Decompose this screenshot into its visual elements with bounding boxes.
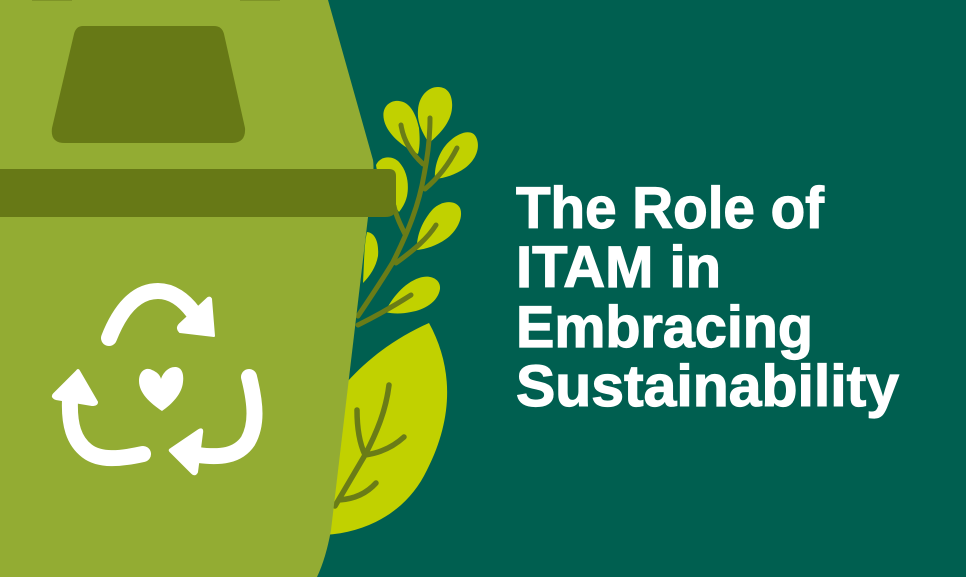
title: Embracing — [516, 295, 813, 360]
icon: large leaf — [325, 323, 447, 535]
title: The Role of — [516, 176, 825, 241]
icon: recycling symbol with heart — [53, 291, 254, 474]
icon: leafy branch — [358, 87, 478, 325]
bin lid rim — [0, 169, 396, 217]
bin top edge marks — [32, 0, 280, 1]
title: Sustainability — [516, 354, 899, 419]
title: ITAM in — [516, 235, 721, 300]
arrow: top — [109, 291, 214, 338]
leaves — [363, 87, 478, 314]
stems — [358, 118, 457, 325]
bin body — [0, 0, 374, 577]
arrow: right — [170, 377, 254, 474]
bin lid slot — [52, 26, 245, 143]
title — [516, 176, 899, 419]
heart — [139, 367, 183, 411]
arrow: left — [53, 370, 143, 458]
